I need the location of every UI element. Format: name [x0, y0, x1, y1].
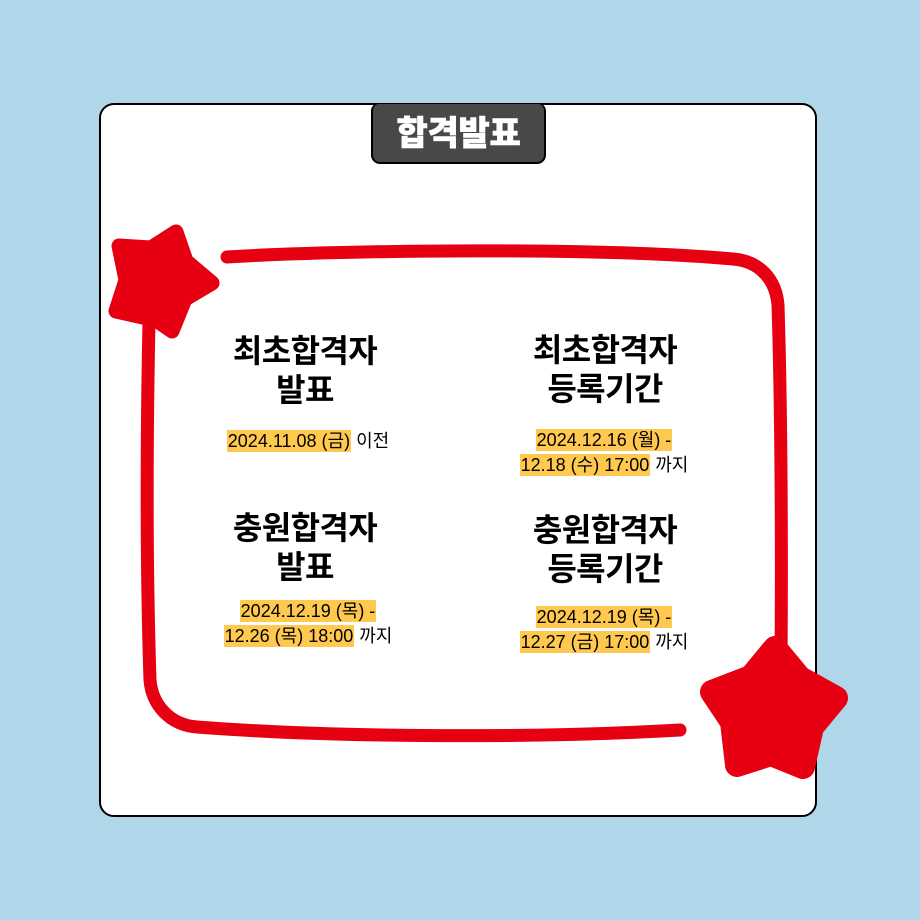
icon: bottom-right star: [712, 648, 836, 767]
date: additional-round announcement: [224, 600, 392, 647]
date: first-round registration: [520, 429, 688, 476]
date: first-round registration: 까지: [655, 454, 688, 474]
heading: additional-round registration: 등록기간: [547, 550, 663, 586]
date: additional-round announcement: 12.26 (목) 18:00: [225, 626, 353, 646]
heading: additional-round announcement: [233, 510, 378, 584]
date: first-round registration: 2024.12.16 (월) -: [537, 430, 671, 450]
title badge: 합격발표: [397, 115, 520, 153]
heading: first-round announcement: 발표: [276, 372, 334, 408]
date: first-round announcement: 이전: [356, 431, 389, 451]
date: additional-round registration: 까지: [655, 632, 688, 652]
date: additional-round registration: 2024.12.19 (목) -: [537, 607, 671, 627]
heading: first-round registration: 등록기간: [547, 370, 663, 406]
heading: first-round announcement: 최초합격자: [233, 333, 377, 369]
date: first-round announcement: 2024.11.08 (금): [228, 431, 350, 451]
heading: first-round registration: [533, 332, 678, 406]
date: additional-round announcement: 까지: [359, 626, 392, 646]
title badge: [371, 103, 546, 164]
date: additional-round registration: [520, 606, 688, 653]
date: first-round announcement: [227, 430, 389, 452]
red frame line: [147, 251, 781, 736]
date: additional-round registration: 12.27 (금) 17:00: [521, 632, 649, 652]
heading: additional-round announcement: 충원합격자: [233, 510, 377, 546]
icon: top-left star: [116, 232, 212, 331]
heading: additional-round registration: 충원합격자: [533, 512, 677, 548]
heading: additional-round registration: [533, 512, 678, 586]
panel: white card: [99, 103, 817, 817]
heading: first-round announcement: [233, 333, 378, 408]
heading: additional-round announcement: 발표: [276, 548, 334, 584]
heading: first-round registration: 최초합격자: [533, 332, 677, 368]
date: additional-round announcement: 2024.12.19 (목) -: [241, 601, 375, 621]
date: first-round registration: 12.18 (수) 17:00: [521, 454, 649, 474]
